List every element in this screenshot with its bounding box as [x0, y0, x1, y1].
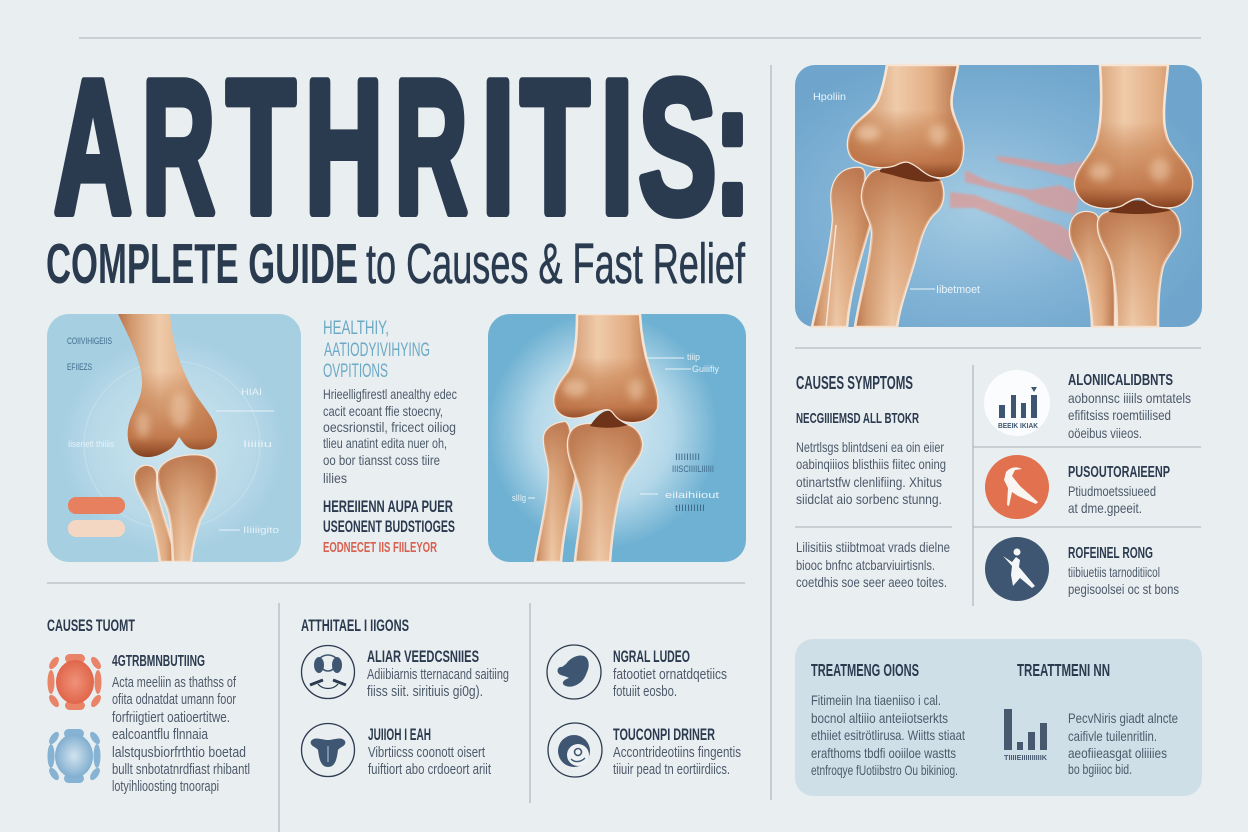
panel: treatment options: TREATMENG OIONS — [811, 660, 919, 680]
item: navy exercise circle: pegisoolsei oc st bons — [1068, 581, 1179, 597]
anatomy labels: Guiiifiy — [692, 364, 719, 374]
text block: healthy options: oecsrionstil, fricect oiliog — [323, 419, 456, 435]
icon: hand glyph — [547, 645, 601, 699]
section: causes symptoms: otinartstfw clenlifiing. Xhitus — [796, 474, 942, 490]
text block: healthy options: lilies — [323, 470, 347, 486]
treatment body text — [811, 692, 965, 778]
text block: healthy options: EODNECET IIS FIILEYOR — [323, 540, 437, 556]
anatomy labels: Iisenetl thiiiis — [68, 439, 114, 449]
panel: arthritic knee illustration — [488, 312, 746, 562]
icon: stretching figure — [985, 455, 1049, 519]
item: chart circle: oöeibus viieos. — [1068, 425, 1142, 441]
fibula — [135, 466, 177, 562]
icon: round glyph — [548, 723, 602, 777]
inflammation streaks — [950, 156, 1090, 262]
text block: healthy options: Hrieelligfirestl anealthy edec — [323, 386, 457, 402]
title: : — [714, 42, 751, 254]
title: I — [482, 42, 514, 254]
icon: blue cell — [47, 729, 102, 783]
text block: healthy options: oo bor tiansst coss tiire — [323, 452, 440, 468]
anatomy labels: Iibetmoet — [936, 284, 980, 296]
item: juioh: fuiftiort abo crdoeort ariit — [368, 761, 492, 778]
causes body text: lotyihlioosting tnoorapi — [112, 778, 219, 795]
section: causes: CAUSES TUOMT — [47, 616, 135, 635]
causes body text — [112, 653, 250, 795]
anatomy labels: tiiip — [687, 352, 700, 362]
item: orange exercise circle: Ptiudmoetssiueed — [1068, 483, 1156, 499]
text block: healthy options: OVPITIONS — [323, 361, 388, 382]
item: touconpi: TOUCONPI DRINER — [613, 725, 715, 744]
title: I — [600, 42, 634, 254]
item: navy exercise circle: ROFEINEL RONG — [1068, 545, 1153, 562]
bar chart — [1004, 709, 1047, 762]
item: chart circle: efifitsiss roemtiilised — [1068, 407, 1171, 423]
section: causes symptoms: Lilisitiis stiibtmoat vrads dielne — [796, 539, 950, 555]
item: ngral — [547, 645, 727, 700]
title: S — [638, 42, 716, 254]
item: navy exercise circle: tiibiuetiis tarnoditiicol — [1068, 564, 1160, 580]
causes body text: ofita odnatdat umann foor — [112, 691, 236, 708]
anatomy labels: Hpoliin — [813, 92, 846, 103]
title: A — [54, 42, 132, 254]
item: aliar: Adiibiarnis tternacand saitiing — [367, 666, 509, 683]
treatment side text: PecvNiris giadt alncte — [1068, 710, 1178, 726]
anatomy labels: IIIIIIIII — [675, 452, 700, 462]
causes body text: bullt snbotatnrdfiast rhibantl — [112, 761, 250, 778]
section: causes symptoms: siidclat aio sorbenc stunng. — [796, 491, 942, 507]
item: chart circle: aobonnsc iiiils omtatels — [1068, 390, 1191, 406]
treatment body text: erafthoms tbdfi ooiiloe wastts — [811, 745, 956, 761]
item: ngral: NGRAL LUDEO — [613, 647, 690, 666]
anatomy labels: COIIVIHIGEIIS — [67, 336, 112, 346]
femur — [554, 314, 657, 422]
section: causes symptoms: CAUSES SYMPTOMS — [796, 373, 913, 393]
right knee bones — [1070, 65, 1192, 327]
fibula — [535, 422, 575, 562]
icon: active figure — [985, 537, 1049, 601]
item: orange exercise circle: at dme.gpeeit. — [1068, 500, 1142, 516]
bar chart: TIIIIEIIIIIIIIIIK — [1004, 755, 1047, 762]
icon: orange cell — [47, 654, 103, 710]
title: R — [142, 42, 215, 254]
icon: bar chart in white circle: BEEIK IKIAK — [998, 423, 1038, 430]
item: touconpi — [548, 723, 741, 778]
treatment side text: bo bgiiioc bid. — [1068, 761, 1132, 777]
anatomy labels: tIIIIIIIII — [675, 503, 705, 513]
text block: healthy options: tlieu anatint edita nuer oh, — [323, 435, 447, 451]
tibia — [158, 455, 216, 562]
item: orange exercise circle: PUSOUTORAIEENP — [1068, 464, 1170, 481]
text block: healthy options: USEONENT BUDSTIOGES — [323, 517, 455, 536]
anatomy labels — [813, 92, 980, 296]
section: causes symptoms — [795, 373, 952, 590]
panel: knee comparison illustration — [795, 65, 1202, 327]
text block: healthy options: AATIODYIVIHYING — [324, 340, 430, 361]
causes body text: Acta meeliin as thathss of — [112, 674, 237, 691]
text block: healthy options: HEREIIENN AUPA PUER — [323, 497, 453, 516]
title: T — [520, 42, 590, 254]
text block: healthy options: HEALTHIY, — [323, 318, 389, 339]
tibia — [568, 424, 642, 562]
anatomy labels: IIiiiigito — [243, 525, 279, 535]
section: causes symptoms: coetdhis soe seer aeeo toites. — [796, 574, 947, 590]
item: juioh: JUIIOH I EAH — [368, 725, 431, 744]
anatomy labels: sIIIg — [512, 493, 526, 503]
femur — [118, 314, 217, 457]
text block: healthy options: cacit ecoant ffie stoecny, — [323, 403, 443, 419]
section: causes symptoms: NECGIIIEMSD ALL BTOKR — [796, 410, 919, 427]
treatment body text: ethiiet esitrötlirusa. Wiitts stiaat — [811, 727, 965, 743]
panel: treatment options — [795, 639, 1202, 796]
item: navy exercise circle — [985, 537, 1179, 601]
item: ngral: fotuiit eosbo. — [613, 683, 677, 700]
panel: treatment options: TREATTMENI NN — [1017, 660, 1110, 680]
item: touconpi: tiiuir pead tn eortiirdiics. — [613, 761, 730, 778]
treatment side text: caifivle tuilenritlin. — [1068, 728, 1157, 744]
item: chart circle — [984, 370, 1191, 441]
treatment body text: etnfroqye fUotiibstro Ou bikiniog. — [811, 762, 958, 778]
title: T — [226, 42, 296, 254]
item: aliar — [302, 646, 509, 700]
item: orange exercise circle — [985, 455, 1170, 519]
item: aliar: ALIAR VEEDCSNIIES — [367, 647, 479, 666]
item: aliar: fiiss siit. siritiuis gi0g). — [367, 683, 483, 700]
anatomy labels — [67, 336, 279, 535]
item: chart circle: ALONIICALIDBNTS — [1068, 372, 1173, 389]
title: R — [394, 42, 468, 254]
item: juioh — [302, 724, 492, 778]
text block: healthy options — [323, 318, 457, 556]
anatomy labels: EFIIEZS — [67, 362, 92, 372]
section: causes symptoms: oabinqiiios blisthiis fiitec oning — [796, 456, 946, 472]
anatomy labels: Iiiiiiu — [243, 439, 272, 449]
causes body text: 4GTRBMNBUTIING — [112, 653, 205, 670]
icon: joint glyph — [302, 724, 354, 776]
item: juioh: Vibrtiicss coonott oisert — [368, 744, 486, 761]
section: arthritis types heading: ATTHITAEL I IIGONS — [301, 616, 409, 635]
treatment side text: aeofiieasgat oliiiies — [1068, 745, 1167, 761]
anatomy labels: IIISCIIIILIIIIII — [672, 464, 714, 474]
section: causes — [47, 616, 250, 795]
section: causes symptoms: biooc bnfnc atcbarviuirtisnls. — [796, 557, 935, 573]
icon: joint outline — [302, 646, 354, 698]
causes body text: lalstqusbiorfrthtio boetad — [112, 744, 246, 761]
title: H — [305, 42, 383, 254]
section: causes symptoms: Netrtlsgs blintdseni ea oin eiier — [796, 439, 944, 455]
anatomy labels: HIAI — [241, 387, 262, 397]
treatment body text: bocnol altiiio anteiiotserkts — [811, 710, 948, 726]
treatment side text — [1068, 710, 1178, 777]
anatomy labels: eilaihiiout — [665, 490, 720, 500]
item: ngral: fatootiet ornatdqetiics — [613, 666, 727, 683]
causes body text: forfriigtiert oatioertitwe. — [112, 709, 230, 726]
legend pills — [68, 497, 125, 537]
treatment body text: Fitimeiin Ina tiaeniiso i cal. — [811, 692, 941, 708]
subtitle: to Causes & Fast Relief — [366, 232, 745, 296]
subtitle: COMPLETE GUIDE — [46, 232, 358, 296]
causes body text: ealcoantflu flnnaia — [112, 726, 209, 743]
joint gap — [590, 411, 628, 428]
panel: healthy knee illustration — [47, 314, 301, 562]
anatomy labels — [512, 352, 720, 513]
left knee bones — [812, 65, 963, 327]
icon: bar chart in white circle — [984, 370, 1050, 436]
item: touconpi: Accontrideotiins fingentis — [613, 744, 741, 761]
